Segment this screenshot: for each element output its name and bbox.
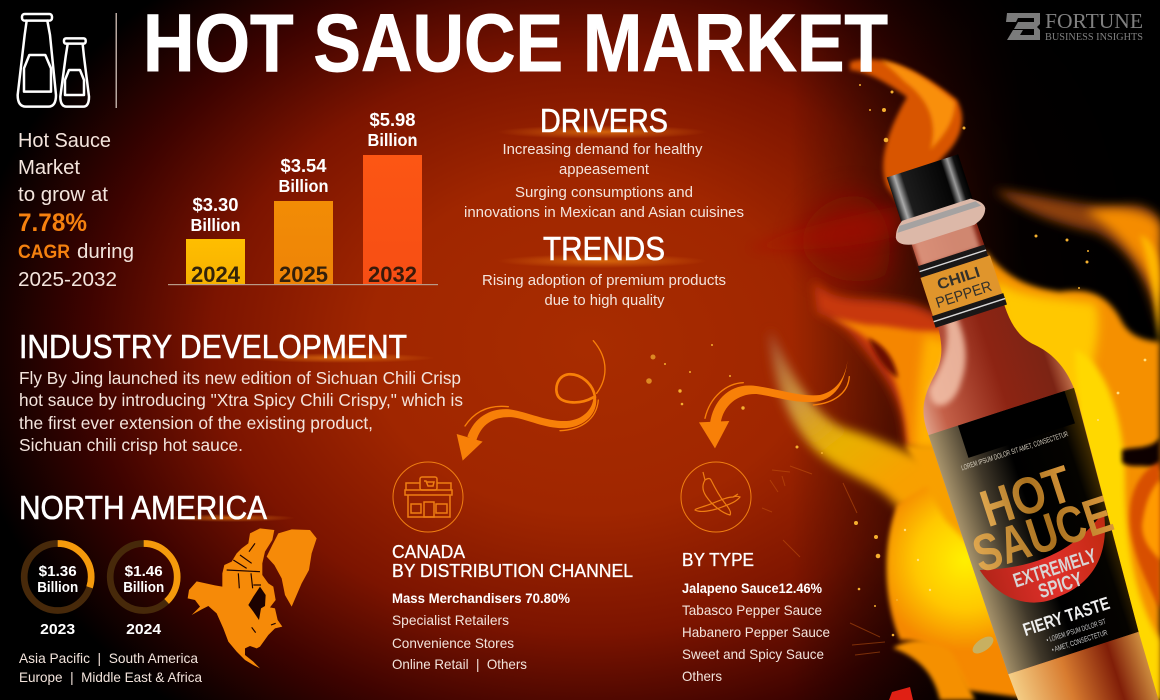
- drivers text: [464, 141, 744, 221]
- neck label: [916, 244, 1007, 328]
- bar: 2024: [186, 194, 245, 287]
- trends text: Rising adoption of premium products: [482, 272, 726, 289]
- trends text: [482, 272, 726, 309]
- logo mark: [1006, 13, 1040, 40]
- drivers heading: [497, 102, 707, 139]
- by type heading: BY TYPE: [682, 550, 754, 570]
- growth text block: to grow at: [18, 183, 108, 206]
- drivers text: appeasement: [559, 161, 650, 178]
- main label: SPICY: [1036, 568, 1086, 603]
- main label: • LOREM IPSUM DOLOR SIT: [1045, 617, 1107, 644]
- bar: 2025: [274, 155, 333, 287]
- north america heading: NORTH AMERICA: [19, 489, 267, 526]
- growth text block: 7.78%: [18, 209, 87, 237]
- bar chart: [168, 109, 438, 287]
- by type list: [682, 581, 830, 684]
- sauce droplet: [970, 633, 996, 657]
- by type list: Habanero Pepper Sauce: [682, 624, 830, 640]
- hot sauce bottle: [849, 143, 1159, 700]
- lower wisp: [893, 640, 975, 700]
- icon: chili peppers: [681, 462, 751, 532]
- bottle body: [867, 200, 1152, 676]
- trends heading: TRENDS: [543, 230, 665, 267]
- growth text block: [18, 129, 134, 291]
- brand logo: [1006, 9, 1143, 43]
- donut: 2024: [110, 544, 177, 638]
- map: north america: [188, 528, 317, 668]
- industry development text: the first ever extension of the existing product,: [19, 413, 373, 433]
- drivers heading: DRIVERS: [540, 102, 668, 139]
- main label: • AMET, CONSECTETUR: [1051, 628, 1109, 654]
- flames behind the bottle: [745, 59, 1160, 700]
- industry development heading: INDUSTRY DEVELOPMENT: [19, 328, 407, 365]
- donut: 2023: 2023: [40, 621, 75, 638]
- distribution channel list: Online Retail | Others: [392, 656, 527, 672]
- by type list: Sweet and Spicy Sauce: [682, 646, 824, 662]
- growth text block: Hot Sauce: [18, 129, 111, 152]
- growth text block: 2025-2032: [18, 268, 117, 291]
- yellow flame left of bottle: [886, 450, 1040, 700]
- brand logo: FORTUNE: [1045, 9, 1143, 33]
- donut: 2024: $1.46: [125, 563, 163, 580]
- other regions text: Europe | Middle East & Africa: [19, 669, 202, 685]
- trends text: due to high quality: [544, 292, 665, 309]
- distribution channel list: Convenience Stores: [392, 635, 514, 651]
- neck label: CHILI: [935, 264, 982, 294]
- growth text block: Market: [18, 156, 80, 179]
- icon: store: [393, 462, 463, 532]
- arrow: to distribution channel: [457, 341, 605, 461]
- industry development text: Fly By Jing launched its new edition of Sichuan Chili Crisp: [19, 368, 461, 388]
- bottle base: [1008, 632, 1159, 700]
- bottle upper part: [849, 143, 1152, 676]
- bar: 2032: 2032: [368, 262, 417, 287]
- header divider: [116, 13, 117, 108]
- upper wisp: [850, 59, 962, 205]
- main label: FIERY TASTE: [1020, 593, 1112, 640]
- icon: sauce bottles: [18, 14, 89, 107]
- distribution channel heading: CANADA: [392, 542, 465, 562]
- industry development text: [19, 368, 463, 455]
- growth text block: CAGR: [18, 242, 70, 263]
- drivers text: Surging consumptions and: [515, 184, 693, 201]
- drivers text: Increasing demand for healthy: [502, 141, 703, 158]
- brand logo: BUSINESS INSIGHTS: [1045, 32, 1143, 43]
- growth text block: during: [77, 240, 134, 263]
- main label: LOREM IPSUM DOLOR SIT AMET, CONSECTETUR: [960, 429, 1070, 472]
- distribution channel list: Specialist Retailers: [392, 612, 509, 628]
- yellow flame right of neck: [985, 250, 1160, 700]
- bar: 2024: 2024: [191, 262, 240, 287]
- main label: HOT: [974, 455, 1079, 539]
- sparks: [646, 84, 1146, 655]
- by type list: Tabasco Pepper Sauce: [682, 602, 822, 618]
- bottle neck highlight: [912, 219, 980, 267]
- bar: 2025: Billion: [278, 176, 328, 196]
- lip ring highlight: [896, 200, 981, 233]
- trends heading: [497, 230, 707, 268]
- left flame band: [770, 330, 960, 525]
- bar: 2025: $3.54: [280, 155, 327, 176]
- distribution channel heading: [392, 542, 633, 581]
- top-right flame: [995, 190, 1160, 330]
- distribution channel list: Mass Merchandisers 70.80%: [392, 591, 570, 606]
- bottle cap: [887, 154, 973, 222]
- bar: 2025: 2025: [279, 262, 328, 287]
- donut: 2024: Billion: [123, 580, 164, 596]
- neck label: PEPPER: [934, 278, 994, 312]
- distribution channel heading: BY DISTRIBUTION CHANNEL: [392, 561, 633, 581]
- industry development text: hot sauce by introducing "Xtra Spicy Chili Crispy," which is: [19, 390, 463, 410]
- donut: 2023: Billion: [37, 580, 78, 596]
- bar: 2024: $3.30: [192, 194, 238, 215]
- upper flame by neck: [813, 280, 950, 445]
- main label: EXTREMELY: [1011, 545, 1100, 592]
- donut: 2023: $1.36: [39, 563, 77, 580]
- donut: 2024: 2024: [126, 621, 162, 638]
- title: HOT SAUCE MARKET: [143, 0, 888, 89]
- main label: [928, 388, 1152, 675]
- distribution channel list: [392, 591, 570, 672]
- bar: 2032: Billion: [368, 130, 418, 150]
- bar: 2032: $5.98: [370, 109, 416, 130]
- yellow along right of bottle: [1075, 350, 1160, 700]
- main label: SAUCE: [966, 485, 1120, 584]
- by type list: Others: [682, 668, 722, 684]
- bar: 2032: [363, 109, 422, 287]
- bar: 2024: Billion: [190, 215, 240, 235]
- arrow: to type: [699, 360, 849, 448]
- bottle lip: [891, 195, 989, 249]
- by type list: Jalapeno Sauce12.46%: [682, 581, 822, 596]
- other regions text: Asia Pacific | South America: [19, 650, 198, 666]
- drivers text: innovations in Mexican and Asian cuisines: [464, 204, 744, 221]
- other regions text: [19, 650, 202, 685]
- donut: 2023: [24, 544, 91, 638]
- industry development text: Sichuan chili crisp hot sauce.: [19, 435, 243, 455]
- bottle shoulder highlight: [908, 313, 982, 408]
